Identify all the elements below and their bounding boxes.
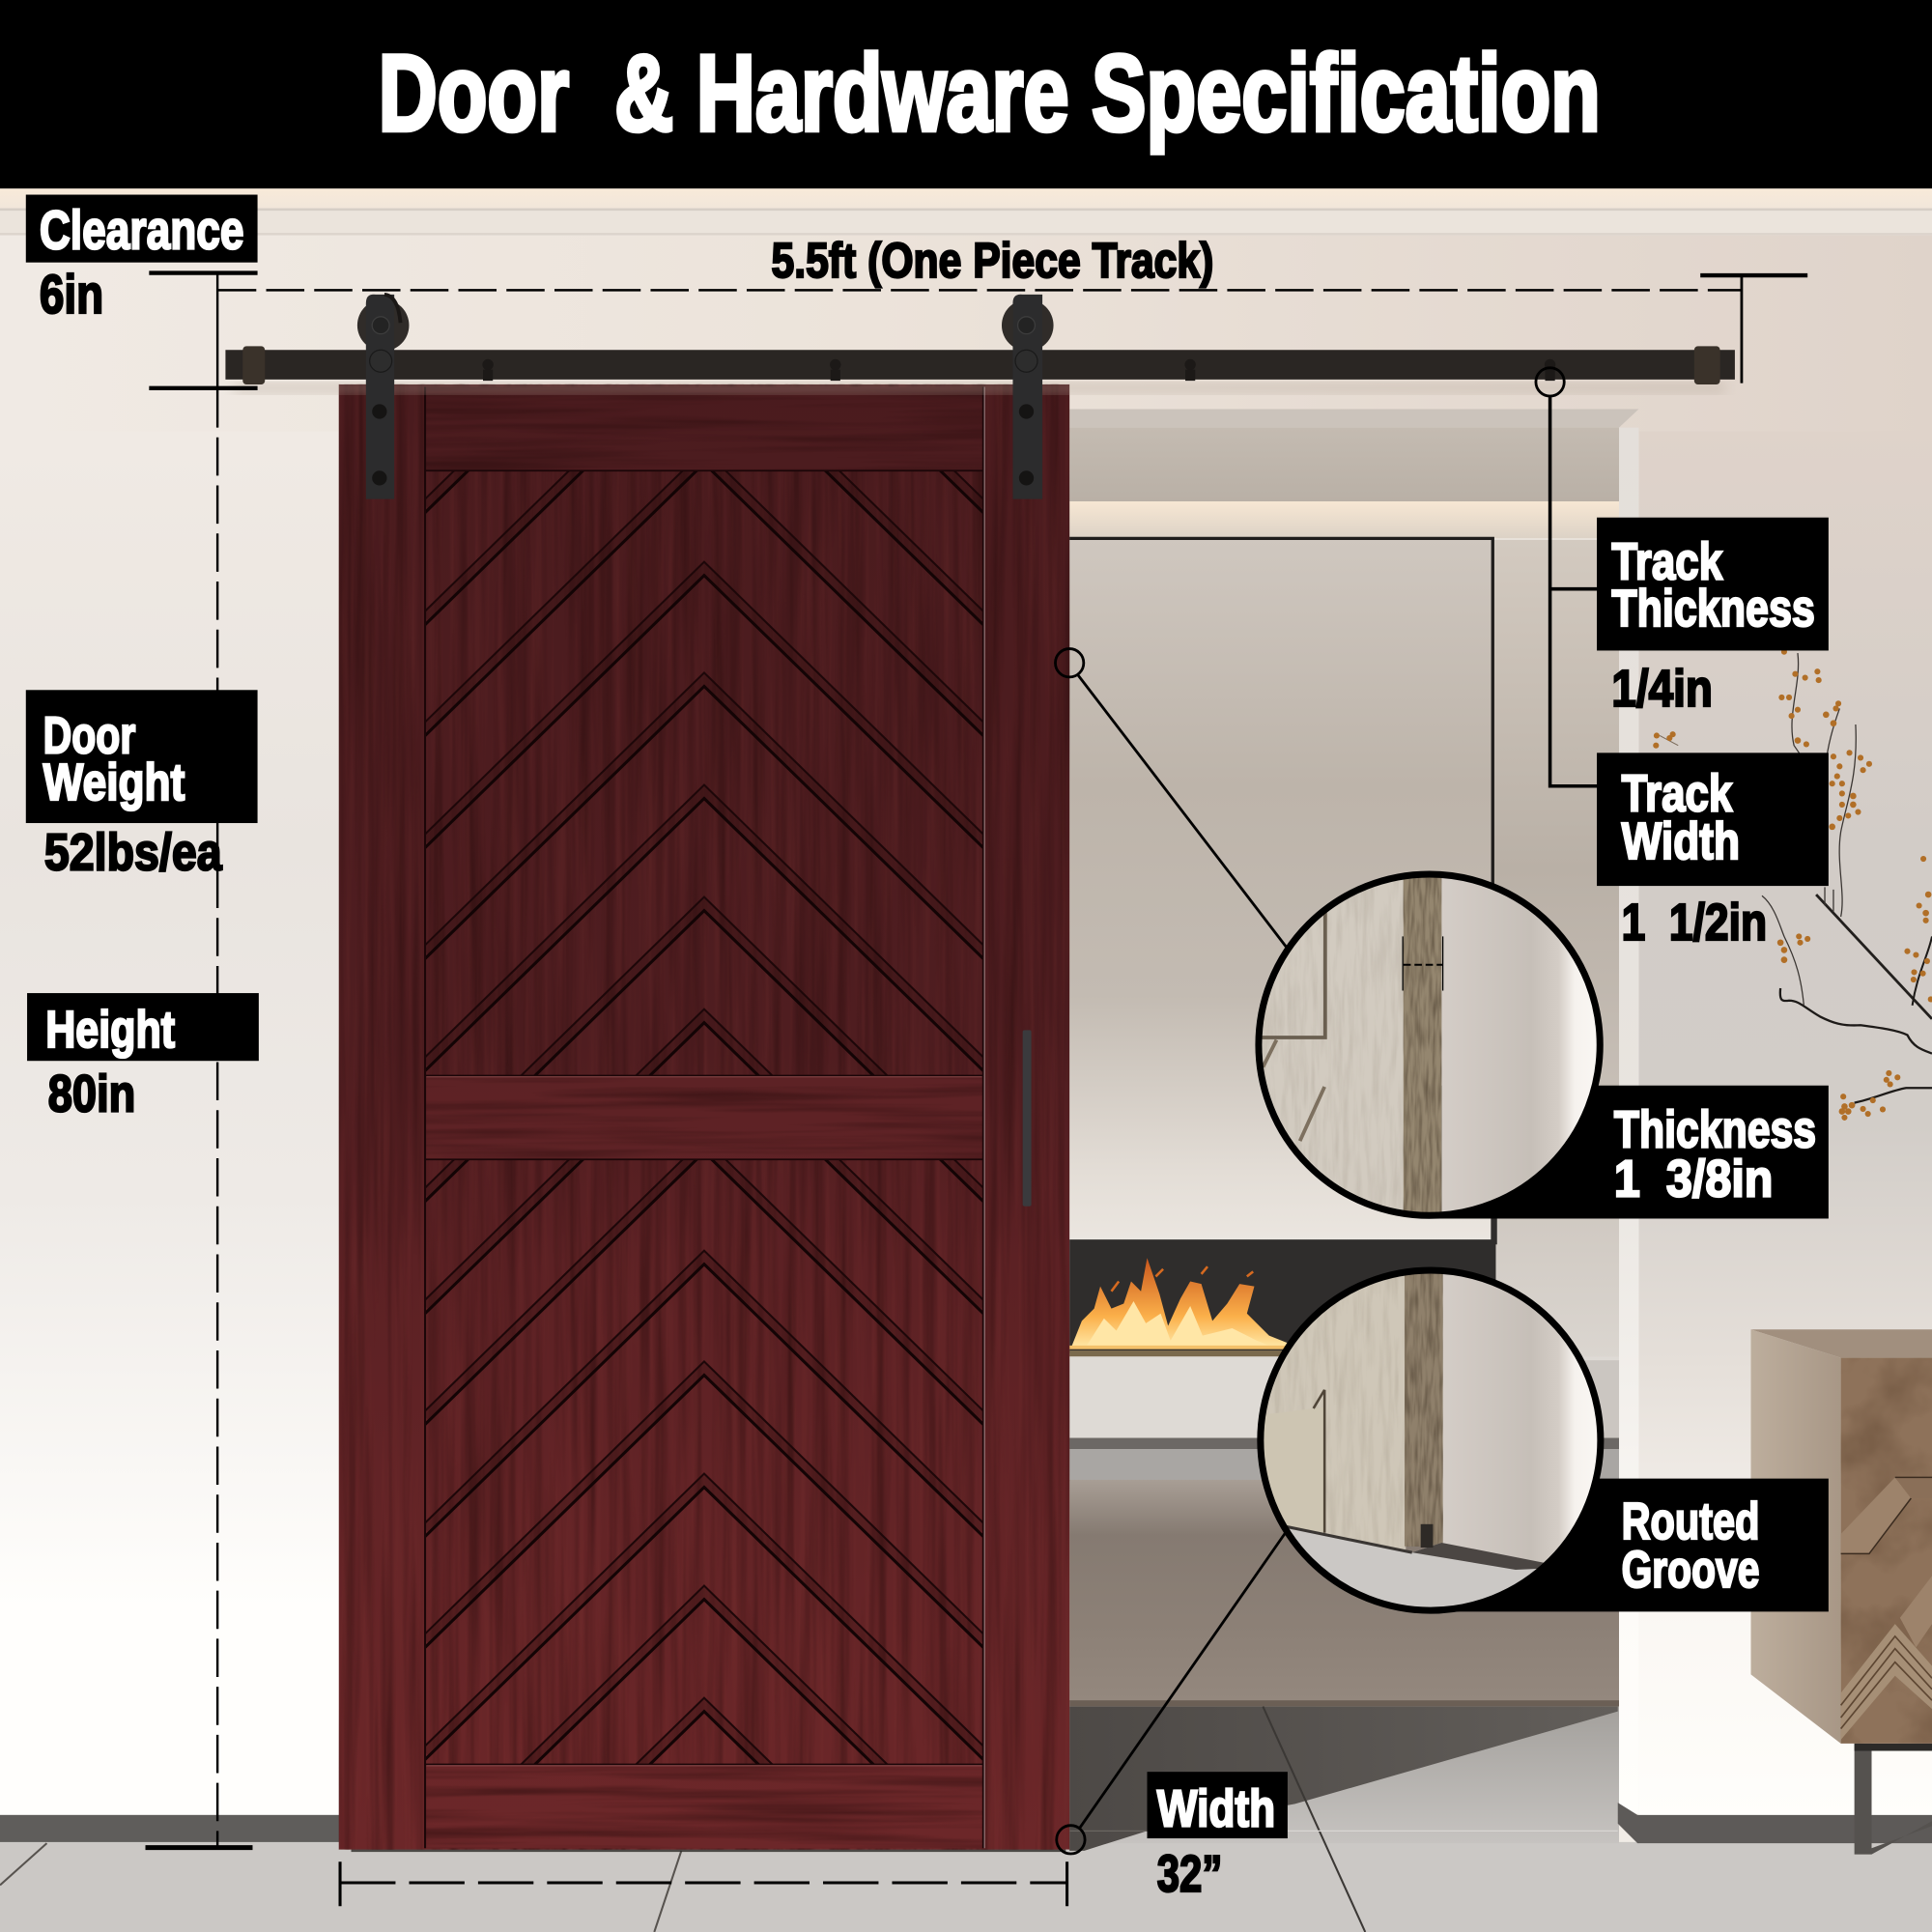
- main floor: [0, 1842, 1932, 1932]
- panel outlines: [425, 387, 983, 1848]
- right wall of recess: [1493, 540, 1619, 1361]
- cabinet legs: [1855, 1744, 1932, 1855]
- floor seams: [0, 1843, 681, 1932]
- value: height: 80in: [48, 1066, 135, 1123]
- label: door thickness: 1 3/8in: [1614, 1151, 1773, 1208]
- hearth: [1069, 1356, 1619, 1438]
- label: track thickness: Track: [1611, 533, 1722, 590]
- track shadow: [234, 384, 1725, 393]
- cabinet top: [1750, 1329, 1932, 1358]
- label: height: Height: [45, 1002, 175, 1059]
- barn door: [339, 227, 1069, 1932]
- door slab: [339, 384, 1069, 1850]
- fireplace: [1069, 1213, 1497, 1356]
- right hanger: [1002, 295, 1054, 499]
- chevron grooves lower panel: [425, 916, 983, 1932]
- zoom circle: door thickness: [1256, 871, 1605, 1221]
- vertical wood grain: [339, 384, 1069, 1850]
- track bolts: [482, 359, 1555, 381]
- door shadow on floor: [352, 1846, 1065, 1852]
- label: routed groove: [1622, 1493, 1759, 1599]
- right wall: [1638, 431, 1932, 1817]
- value: 6in: 6in: [40, 264, 103, 325]
- value: track width: 1 1/2in: [1622, 895, 1767, 952]
- back floor: [1069, 1449, 1619, 1481]
- chevron grooves upper panel: [425, 227, 983, 1295]
- track bar: [225, 350, 1735, 380]
- frame line: [1069, 538, 1492, 1244]
- label: routed groove: Routed: [1622, 1493, 1759, 1550]
- label: track thickness: Thickness: [1611, 581, 1815, 638]
- title bar: [0, 0, 1932, 188]
- dimension: clearance and height lines: [146, 273, 258, 1848]
- left hanger: [357, 295, 409, 499]
- dimension: track length line: [218, 274, 1807, 384]
- label: track thickness: [1597, 518, 1829, 650]
- hearth base band: [1069, 1438, 1619, 1449]
- right skirting: [1618, 1803, 1932, 1843]
- floor shadow: [1069, 1707, 1618, 1851]
- soffit: [1069, 409, 1638, 428]
- left stopper: [242, 346, 265, 384]
- label: track width: Track: [1622, 765, 1733, 822]
- opening reveal: [1619, 428, 1638, 1814]
- bottom rail: [425, 1765, 983, 1848]
- dimension: door width line: [340, 1861, 1067, 1906]
- top rail: [425, 387, 983, 470]
- value: track thickness: 1/4in: [1611, 661, 1713, 718]
- door edge marker and leader: [1055, 649, 1288, 949]
- label: door thickness: [1614, 1101, 1816, 1208]
- upper recess: [1069, 428, 1619, 501]
- right stopper: [1694, 346, 1720, 384]
- label: track width: [1597, 753, 1829, 886]
- upper wall: [0, 236, 1932, 433]
- zoom circle: routed groove: [1256, 1269, 1614, 1627]
- value: width: 32”: [1157, 1846, 1222, 1903]
- label: door thickness: Thickness: [1614, 1101, 1816, 1158]
- flames: [1072, 1258, 1288, 1348]
- label: track length: 5.5ft (One Piece Track): [771, 233, 1213, 288]
- label: height: [27, 993, 259, 1061]
- track leader lines: [1536, 368, 1598, 786]
- ceiling light strip: [0, 188, 1932, 210]
- label: track width: Width: [1622, 813, 1740, 870]
- door handle: [1023, 1030, 1032, 1207]
- label: clearance: Clearance: [40, 200, 244, 261]
- warm light cove: [1069, 501, 1619, 538]
- cabinet: [1750, 1329, 1932, 1855]
- label: door weight: Weight: [43, 754, 185, 811]
- left skirting: [0, 1815, 340, 1843]
- wall branches with berries: [1653, 649, 1932, 1121]
- crown moulding: [0, 209, 1932, 236]
- back wall panel: [1069, 540, 1493, 1242]
- door bottom marker and leader: [1057, 1528, 1289, 1854]
- label: width: Width: [1157, 1780, 1275, 1837]
- label: door weight: Door: [43, 707, 135, 764]
- cabinet front: [1841, 1358, 1932, 1744]
- fine light grain: [339, 384, 1069, 1850]
- value: door weight: 52lbs/ea: [44, 825, 223, 882]
- label: door weight: [26, 690, 258, 823]
- sliding track hardware: [225, 295, 1735, 499]
- middle rail: [425, 1076, 983, 1159]
- opening into next room: [1069, 409, 1932, 1932]
- label backing: thickness: [1430, 1086, 1829, 1218]
- label: routed groove: Groove: [1622, 1542, 1759, 1599]
- cabinet side: [1750, 1329, 1841, 1744]
- left wall: [0, 431, 340, 1817]
- label backing: routed groove: [1430, 1479, 1829, 1611]
- track marker circle: [1536, 368, 1564, 396]
- rug: [1069, 1480, 1619, 1701]
- room floor: [1069, 1707, 1619, 1843]
